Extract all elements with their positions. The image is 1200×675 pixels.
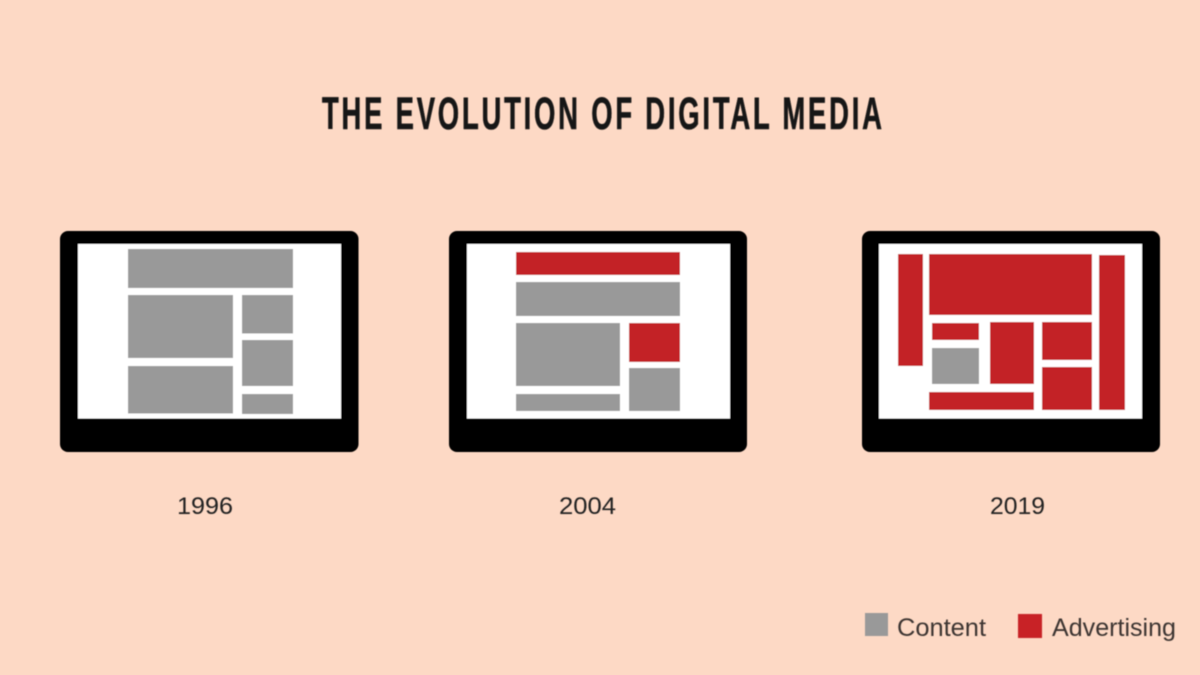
legend swatch: advertising xyxy=(1018,614,1042,638)
legend label: advertising: Advertising xyxy=(1052,614,1176,642)
panel: 2019 device xyxy=(862,231,1160,452)
advertising blocks xyxy=(898,254,1125,410)
legend swatch: content xyxy=(865,613,888,636)
screen xyxy=(78,244,341,418)
device frame xyxy=(449,231,747,452)
content blocks xyxy=(128,249,293,414)
screen xyxy=(879,244,1142,418)
device frame xyxy=(862,231,1160,452)
screen xyxy=(467,244,730,418)
year label 2019: 2019 xyxy=(990,493,1045,520)
panel: 2004 device xyxy=(449,231,747,452)
device frame xyxy=(60,231,358,452)
title: THE EVOLUTION OF DIGITAL MEDIA xyxy=(322,88,882,139)
year label 2004: 2004 xyxy=(559,493,616,520)
year label 1996: 1996 xyxy=(177,493,233,520)
legend label: content: Content xyxy=(897,614,986,642)
content blocks xyxy=(516,282,680,411)
panel: 1996 device xyxy=(60,231,358,452)
advertising blocks xyxy=(516,252,680,362)
legend xyxy=(865,613,1176,642)
content block xyxy=(932,348,979,384)
